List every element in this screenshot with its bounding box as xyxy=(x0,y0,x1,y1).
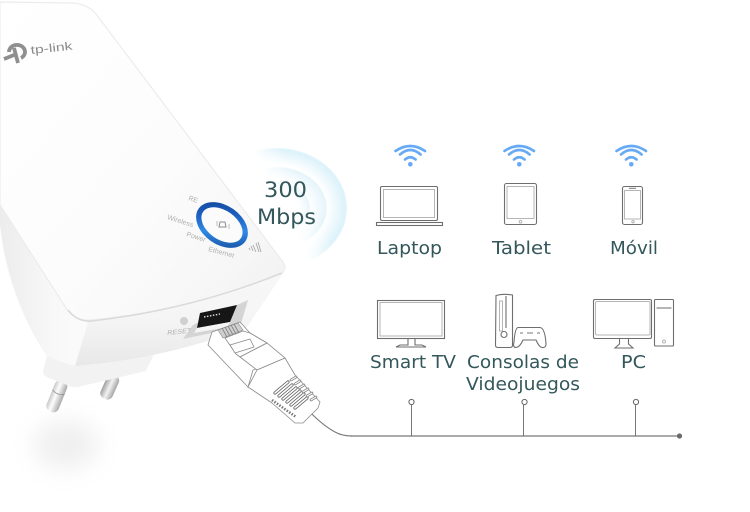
device: Laptop xyxy=(376,146,442,259)
speed label: 300 Mbps: 300 xyxy=(264,178,307,202)
node: Smart TV xyxy=(409,399,414,436)
node: consoles xyxy=(522,399,527,436)
logo mark xyxy=(4,45,25,63)
floor shadow xyxy=(34,421,98,469)
signal mark xyxy=(249,242,261,252)
speed signal waves xyxy=(260,148,347,256)
device: Consolas de Videojuegos xyxy=(466,294,580,395)
status labels: RE xyxy=(187,195,199,205)
plug pin right xyxy=(98,372,121,401)
icon: desktop computer xyxy=(594,300,674,348)
plug pin left xyxy=(45,379,69,414)
network bus line xyxy=(350,399,682,439)
panel lower edge highlight xyxy=(68,273,282,321)
status labels xyxy=(166,195,235,260)
ribbed edge xyxy=(272,400,296,417)
speed label: 300 Mbps xyxy=(257,178,316,229)
label: Smart TV xyxy=(370,353,456,373)
reset hole and label xyxy=(167,317,192,337)
gold contacts xyxy=(218,323,243,338)
icon: tablet xyxy=(504,184,536,224)
latch window xyxy=(230,339,254,353)
icon: game console xyxy=(496,294,546,348)
ethernet port xyxy=(183,300,248,339)
speed label: 300 Mbps: Mbps xyxy=(257,205,316,229)
side shell xyxy=(0,205,88,366)
label: Consolas de xyxy=(467,353,579,373)
icon: laptop xyxy=(376,186,442,226)
label: Laptop xyxy=(377,239,442,259)
plug base xyxy=(43,352,155,387)
large ribs xyxy=(275,382,307,408)
status labels: Wireless xyxy=(166,214,195,229)
range extender device xyxy=(0,2,285,469)
top latch xyxy=(225,331,267,357)
small ribs xyxy=(291,377,316,400)
connector housing xyxy=(208,322,285,387)
icon: tv xyxy=(378,300,444,347)
lower body xyxy=(0,205,284,366)
node: PC xyxy=(633,399,639,436)
label: Móvil xyxy=(610,239,658,259)
device: PC xyxy=(594,300,674,373)
device: Tablet xyxy=(491,146,551,259)
tp-link logo xyxy=(4,41,73,63)
icon: wifi xyxy=(616,146,646,167)
LED ring button xyxy=(187,193,257,257)
icon: wifi xyxy=(504,146,534,167)
device: Smart TV xyxy=(370,300,456,373)
strain relief boot xyxy=(248,358,320,423)
reset hole and label: RESET xyxy=(167,327,192,337)
status labels: Power xyxy=(185,231,207,244)
status labels: Ethernet xyxy=(207,246,235,260)
device: Consolas de Videojuegos: Videojuegos xyxy=(466,375,580,395)
ethernet cable xyxy=(307,409,352,436)
connector neck xyxy=(240,343,285,370)
tp-link logo: tp-link xyxy=(30,41,73,57)
icon: wifi xyxy=(396,146,425,167)
label: PC xyxy=(621,353,646,373)
front panel xyxy=(0,2,285,320)
label: Tablet xyxy=(491,239,551,259)
ethernet connector xyxy=(208,322,320,423)
icon: phone xyxy=(622,186,642,224)
device: Móvil xyxy=(610,146,658,259)
